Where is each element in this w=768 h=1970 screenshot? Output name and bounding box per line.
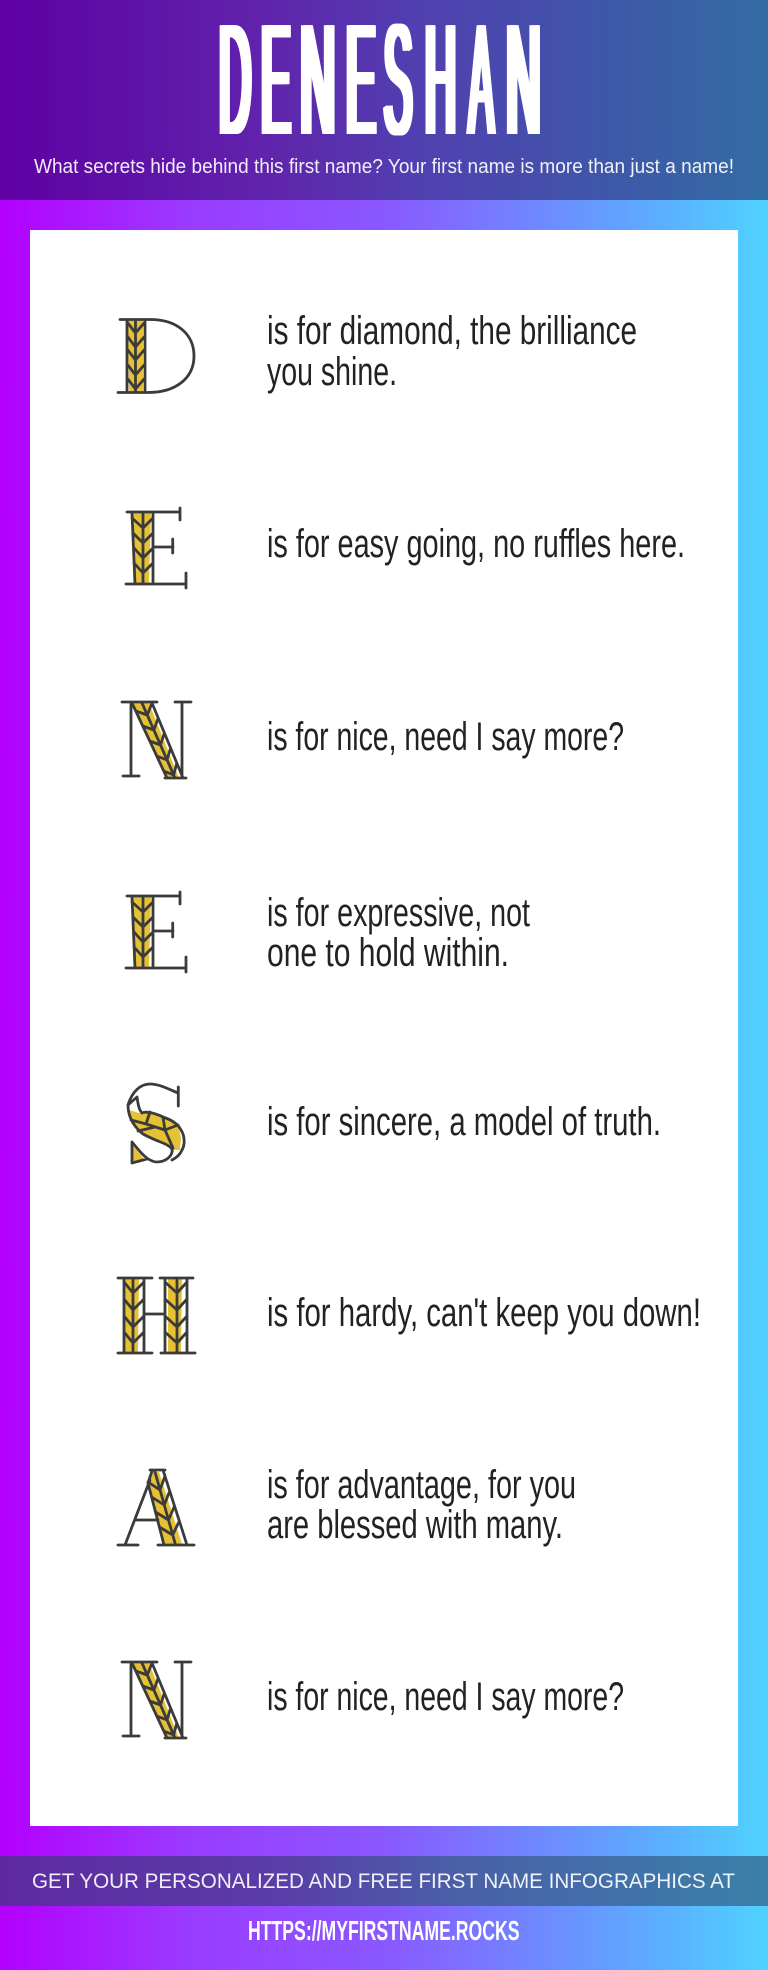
icon: wheat letter A <box>118 1470 194 1545</box>
row: letter E second <box>126 891 530 975</box>
icon: wheat letter E <box>126 508 186 588</box>
footer url: HTTPS://MYFIRSTNAME.ROCKS <box>248 1915 519 1946</box>
row: letter S <box>128 1084 661 1163</box>
icon: wheat letter H <box>118 1278 195 1353</box>
text: E second <box>267 891 530 975</box>
icon: wheat letter N <box>122 702 191 778</box>
text: E second: one to hold within. <box>267 931 509 975</box>
white content panel <box>30 230 738 1826</box>
text: D: is for diamond, the brilliance <box>267 309 637 353</box>
header band <box>0 0 768 200</box>
icon: wheat letter D <box>118 320 194 392</box>
row: letter D <box>118 309 637 394</box>
text: D: you shine. <box>267 350 397 394</box>
icon: wheat letter E <box>126 892 186 972</box>
row: letter N second <box>122 1662 624 1738</box>
row: letter A <box>118 1463 576 1547</box>
text: A: are blessed with many. <box>267 1503 563 1547</box>
footer band <box>0 1856 768 1906</box>
text: N: is for nice, need I say more? <box>267 715 624 759</box>
title <box>216 0 540 168</box>
text: N second: is for nice, need I say more? <box>267 1675 624 1719</box>
text: A <box>267 1463 576 1547</box>
text: E second: is for expressive, not <box>267 891 530 935</box>
footer call to action: GET YOUR PERSONALIZED AND FREE FIRST NAME INFOGRAPHICS AT <box>32 1870 735 1893</box>
text: A: is for advantage, for you <box>267 1463 576 1507</box>
icon: wheat letter N <box>122 1662 191 1738</box>
row: letter H <box>118 1278 701 1353</box>
row: letter N <box>122 702 624 778</box>
row: letter E <box>126 508 685 588</box>
subtitle: What secrets hide behind this first name? Your first name is more than just a name! <box>34 156 734 178</box>
icon: wheat letter S <box>128 1084 184 1163</box>
text: D <box>267 309 637 394</box>
